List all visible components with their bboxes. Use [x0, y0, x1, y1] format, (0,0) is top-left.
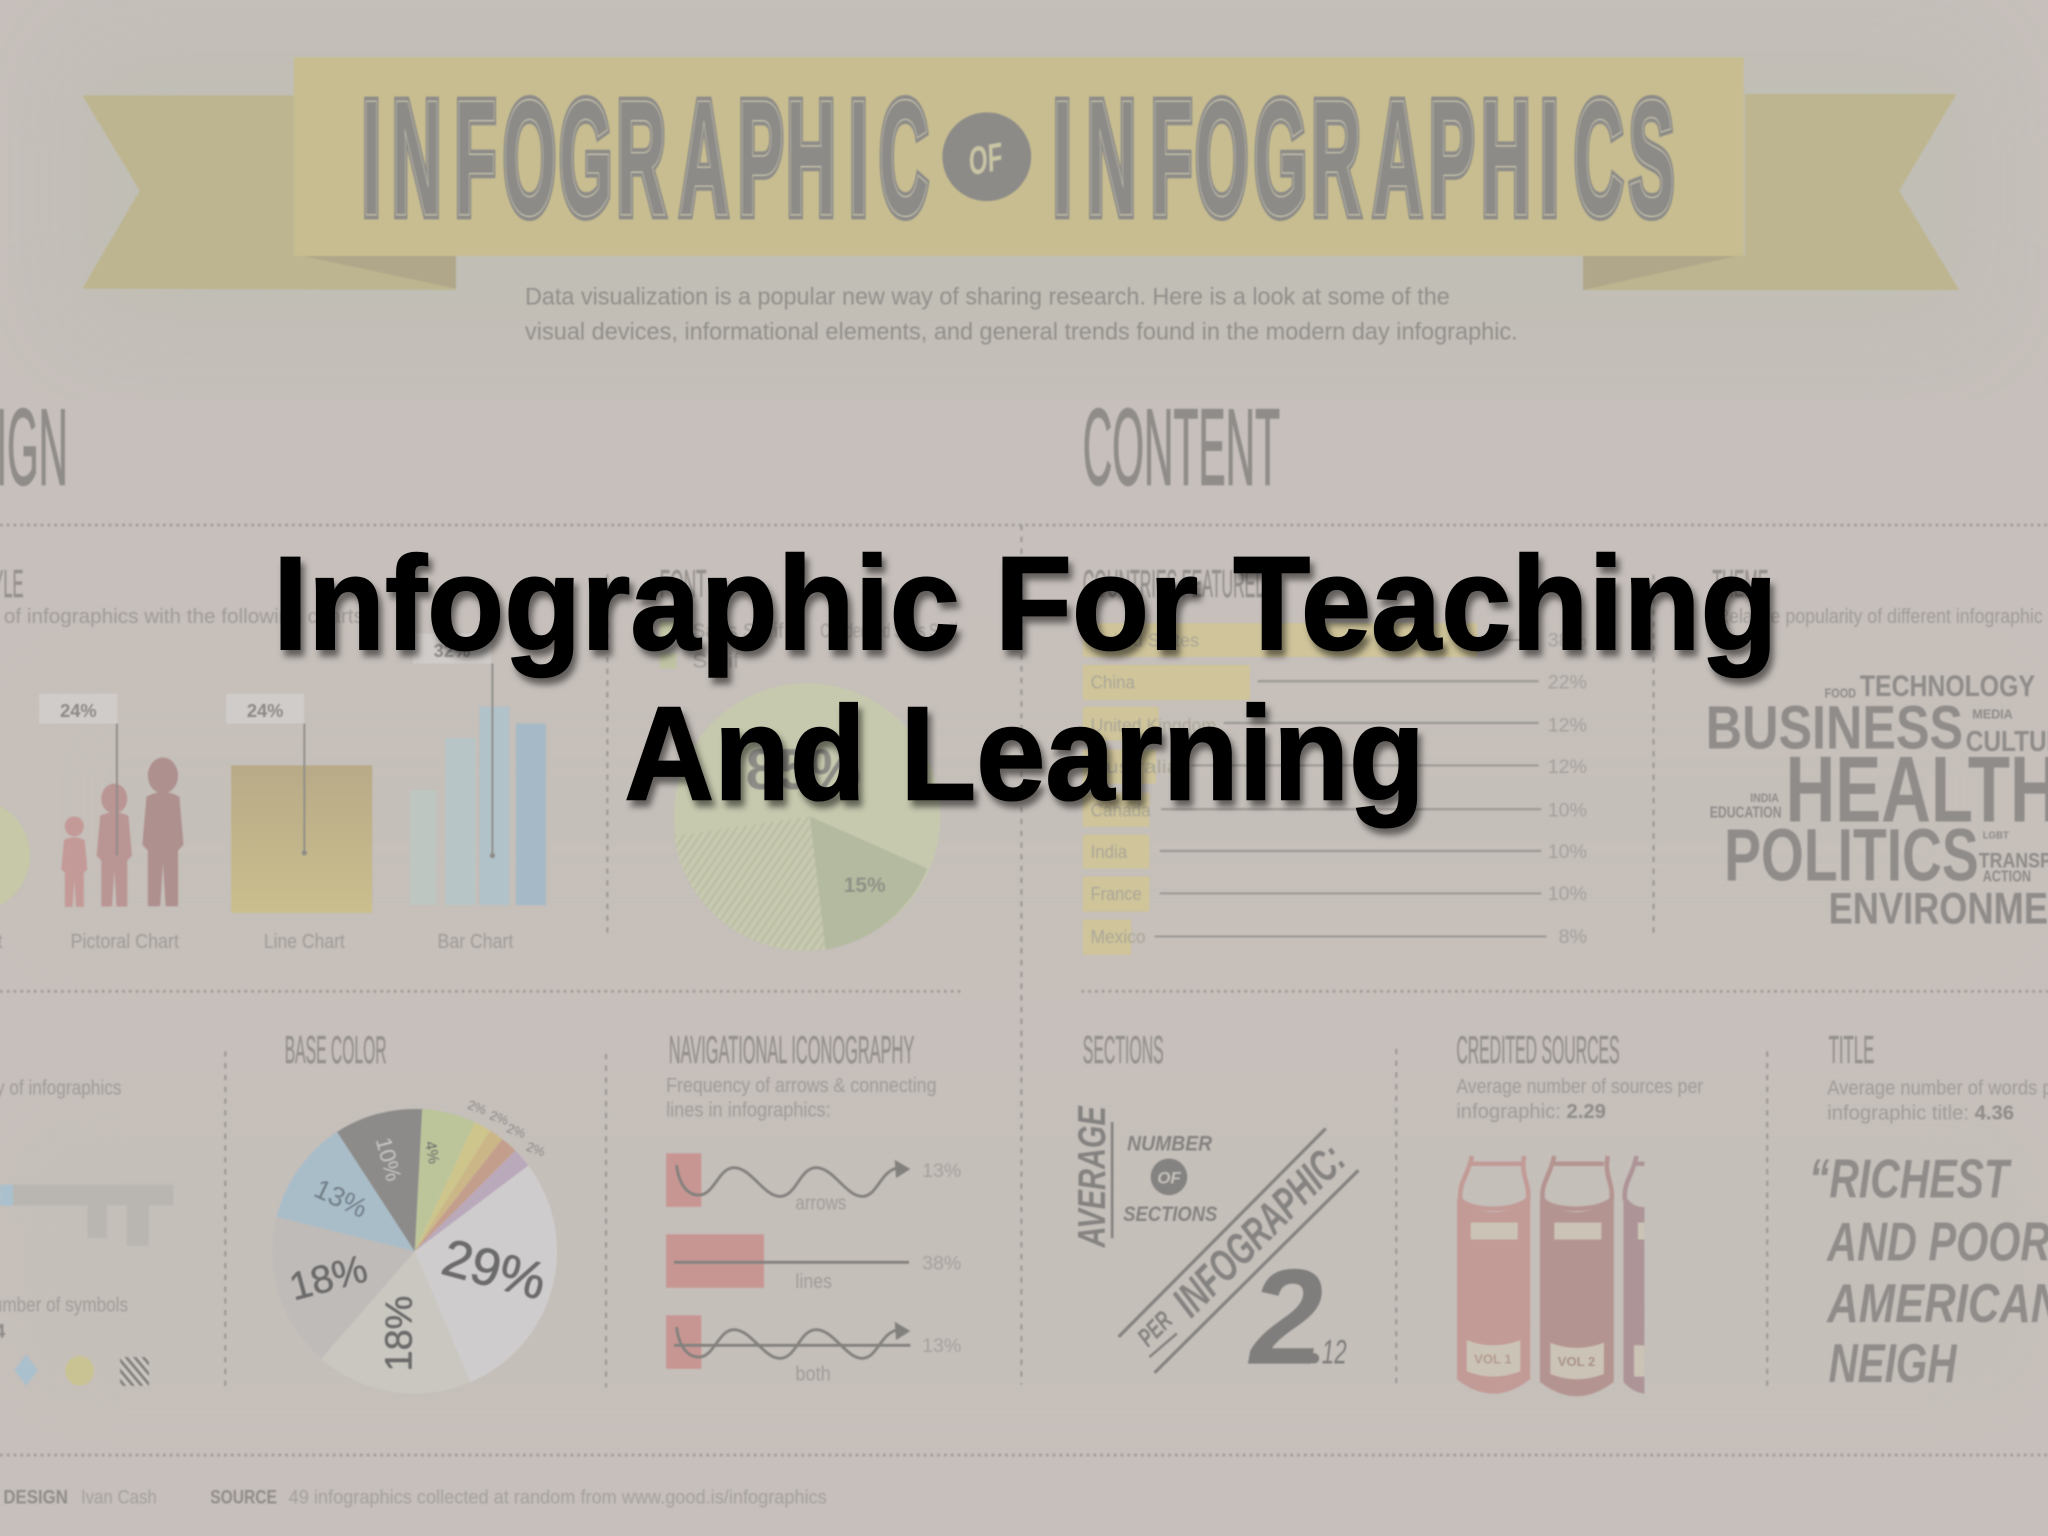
banner title: INFOGRAPHIC: INFOGRAPHIC: [362, 67, 929, 249]
lines row: lines: [795, 1271, 832, 1293]
intro text: [525, 283, 1518, 346]
slide title: Infographic For Teaching: [273, 529, 1778, 678]
symbol icons: [14, 1354, 149, 1386]
banner title: INFOGRAPHICS: INFOGRAPHICS: [1053, 67, 1674, 249]
word cloud: LGBT: [1983, 831, 2009, 842]
panel: credited sources: [1456, 1029, 1703, 1396]
sections typographic badge: 12: [1322, 1334, 1347, 1372]
country names: India: [1091, 841, 1128, 862]
word cloud: FOOD: [1825, 685, 1856, 700]
pictorial chart callout: 24%: [60, 700, 97, 721]
lines row: 38%: [922, 1253, 961, 1275]
panel: style: [0, 563, 546, 953]
pie value labels: 2%: [524, 1139, 548, 1159]
faded infographic artwork: CONTENT: [1083, 387, 1280, 508]
book two: [1540, 1156, 1614, 1396]
panel: theme: THEME: [1712, 563, 1768, 606]
country names: China: [1091, 671, 1136, 692]
font legend: Serif: [692, 650, 740, 672]
font pie chart: 85%: [746, 738, 861, 802]
pie value labels: 13%: [310, 1173, 372, 1224]
pie value labels: 2%: [488, 1107, 511, 1128]
faded infographic artwork: NAVIGATIONAL ICONOGRAPHY: [669, 1029, 914, 1072]
panel: sections: [1071, 1029, 1358, 1393]
arrows row: arrows: [795, 1192, 846, 1214]
key icon: [0, 1185, 174, 1246]
panel: title: [1809, 1029, 2048, 1394]
footer credits: 49 infographics collected at random from www.good.is/infographics: [289, 1486, 827, 1508]
slide title: [273, 529, 1778, 828]
pictorial chart silhouettes: [61, 758, 184, 907]
arrows row: [666, 1153, 961, 1214]
country values: 8%: [1559, 926, 1587, 948]
ribbon fold left: [303, 256, 456, 289]
line chart label: Line Chart: [264, 931, 345, 953]
book three: [1624, 1156, 1644, 1394]
line chart callout: [226, 694, 307, 856]
panel: font: [660, 563, 958, 951]
pie value labels: 18%: [378, 1296, 420, 1371]
font legend: Sans Serif: [692, 620, 784, 642]
book one: [1457, 1156, 1530, 1394]
line chart area: [231, 765, 372, 913]
banner: [82, 57, 1959, 290]
footer credits: [0, 1486, 827, 1508]
title description: [1827, 1078, 2048, 1124]
book one: VOL 1: [1474, 1352, 1512, 1367]
base color pie chart: [272, 1097, 557, 1394]
word cloud: MEDIA: [1972, 706, 2013, 721]
word cloud: ACTION: [1983, 869, 2031, 886]
country values: 10%: [1548, 883, 1587, 905]
navigation description: [666, 1075, 936, 1122]
dividers: [0, 525, 2048, 1455]
sections typographic badge: OF: [1157, 1168, 1181, 1187]
footer credits: SOURCE: [210, 1486, 277, 1508]
panel: base color: BASE COLOR: [285, 1029, 387, 1072]
banner title: INFOGRAPHICS: INFOGRAPHICS: [1053, 67, 1674, 249]
country names: [1091, 630, 1216, 947]
ribbon body: [294, 57, 1744, 256]
slide title: And Learning: [624, 679, 1425, 828]
pie value labels: 18%: [285, 1247, 372, 1309]
banner badge: of: OF: [968, 134, 1003, 184]
navigation description: Frequency of arrows & connecting: [666, 1075, 936, 1097]
both row: both: [795, 1364, 831, 1386]
intro text: Data visualization is a popular new way of sharing research. Here is a look at some of the: [525, 283, 1450, 310]
both row: 13%: [922, 1335, 961, 1357]
country values: 12%: [1548, 714, 1587, 736]
sources description: infographic: 2.29: [1456, 1101, 1606, 1123]
book two: VOL 2: [1558, 1354, 1595, 1369]
lines row: [666, 1234, 961, 1293]
country names: United Kingdom: [1091, 714, 1216, 735]
sections typographic badge: NUMBER: [1127, 1133, 1212, 1156]
country names: Mexico: [1091, 926, 1145, 947]
sections typographic badge: 2: [1247, 1241, 1323, 1393]
title quote: NEIGH: [1829, 1332, 1958, 1394]
ribbon fold right: [1583, 256, 1737, 290]
sections typographic badge: PER: [1131, 1305, 1178, 1352]
country values: 38%: [1548, 630, 1587, 652]
panel: credited sources: CREDITED SOURCES: [1456, 1029, 1620, 1072]
font pie chart: [674, 683, 940, 951]
books icon: [1457, 1156, 1644, 1396]
sections typographic badge: AVERAGE: [1071, 1105, 1114, 1248]
footer credits: Ivan Cash: [81, 1486, 157, 1508]
banner title: INFOGRAPHIC: INFOGRAPHIC: [362, 67, 929, 249]
pie chart icon: [0, 799, 30, 912]
banner badge: of: [942, 112, 1031, 201]
ribbon tail left: [82, 95, 456, 290]
sections typographic badge: SECTIONS: [1123, 1203, 1217, 1226]
panel: symbols: [0, 1078, 174, 1386]
sources description: [1456, 1076, 1703, 1123]
title description: infographic title: 4.36: [1827, 1102, 2014, 1124]
word cloud: [1706, 670, 2048, 933]
country values: 12%: [1548, 756, 1587, 778]
sections typographic badge: INFOGRAPHIC:: [1164, 1135, 1355, 1326]
panel: sections: SECTIONS: [1083, 1029, 1164, 1072]
panel: countries featured: COUNTRIES FEATURED: [1083, 563, 1267, 606]
panel: title: TITLE: [1829, 1029, 1874, 1072]
country names: United States: [1091, 630, 1199, 651]
country names: France: [1091, 883, 1142, 904]
font legend: Condensed Sans Serif: [820, 620, 958, 642]
title quote: [1809, 1148, 2048, 1394]
sections typographic badge: [1071, 1105, 1358, 1393]
country bars: [1083, 623, 1477, 955]
word cloud: BUSINESS: [1706, 693, 1963, 762]
pie value labels: 29%: [436, 1229, 552, 1312]
country names: Canada: [1091, 799, 1151, 820]
bar chart callout: 32%: [434, 640, 470, 661]
panel: base color: [272, 1029, 557, 1394]
pie value labels: [285, 1097, 552, 1371]
word cloud: INDIA: [1750, 792, 1779, 805]
style description: of infographics with the following charts:: [4, 606, 370, 628]
country values: [1548, 630, 1587, 948]
panel: font: FONT: [660, 563, 707, 606]
pie value labels: 4%: [421, 1140, 442, 1165]
bar chart label: Bar Chart: [438, 931, 514, 953]
country values: 22%: [1548, 671, 1587, 693]
panel: navigational iconography: [666, 1029, 961, 1386]
both row: [666, 1315, 961, 1386]
sources description: Average number of sources per: [1456, 1076, 1703, 1098]
country leader lines: [1155, 640, 1546, 936]
ribbon tail right: [1583, 94, 1959, 290]
intro text: visual devices, informational elements, and general trends found in the modern day infographic.: [525, 319, 1518, 346]
banner title: INFOGRAPHIC: INFOGRAPHIC: [362, 67, 929, 249]
panel: countries featured: [1083, 563, 1587, 955]
arrows row: 13%: [922, 1160, 961, 1182]
banner title: INFOGRAPHICS: INFOGRAPHICS: [1053, 67, 1674, 249]
navigation description: lines in infographics:: [666, 1100, 831, 1122]
pictorial chart label: Pictoral Chart: [71, 931, 179, 953]
line chart callout: 24%: [247, 700, 283, 721]
word cloud: EDUCATION: [1710, 805, 1782, 822]
pictorial chart callout: [39, 694, 118, 856]
bar chart bars: [410, 707, 546, 905]
country values: 10%: [1548, 841, 1587, 863]
pie value labels: 2%: [466, 1097, 489, 1118]
font legend: [660, 620, 958, 672]
bar chart callout: [413, 633, 495, 858]
pie value labels: 2%: [505, 1121, 528, 1141]
panel: theme: [1706, 563, 2048, 933]
pie value labels: 10%: [371, 1135, 406, 1184]
country values: 10%: [1548, 799, 1587, 821]
font pie chart: 15%: [844, 874, 886, 897]
country names: Australia: [1091, 756, 1180, 777]
